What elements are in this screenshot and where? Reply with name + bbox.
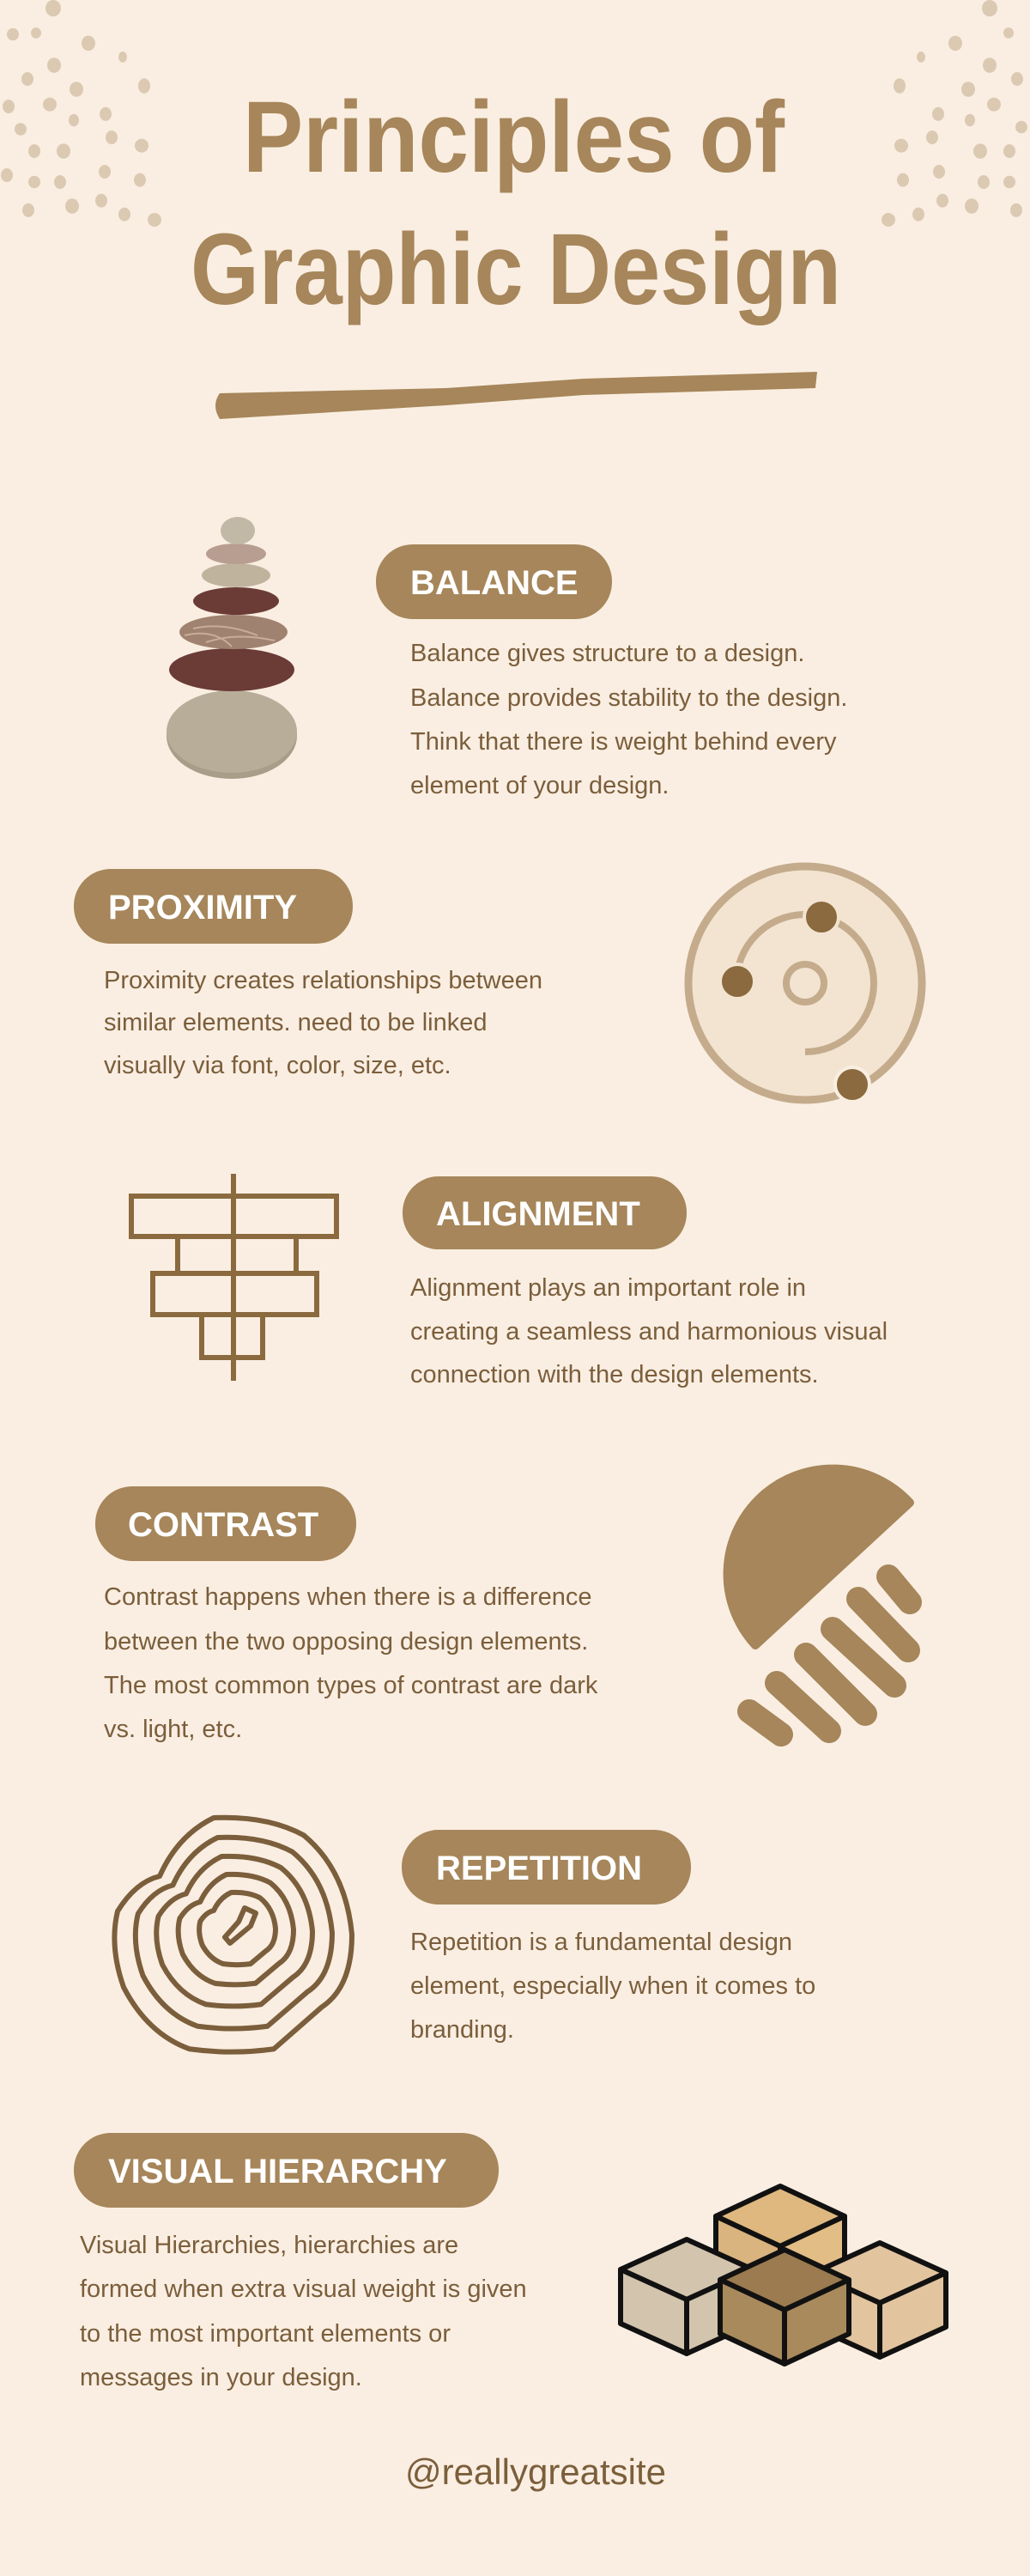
panel: contrast	[95, 1486, 598, 1743]
text: balance: element of your design.	[410, 772, 669, 799]
left cube	[621, 2239, 753, 2300]
text: proximity: similar elements. need to be linked	[104, 1009, 488, 1036]
panel: visual hierarchy	[74, 2133, 527, 2391]
text: visual hierarchy	[80, 2232, 527, 2391]
front cube	[720, 2250, 849, 2310]
text: balance: Balance provides stability to the design.	[410, 684, 847, 712]
title: Graphic Design	[191, 213, 841, 326]
title	[191, 81, 841, 326]
text: contrast: between the two opposing design elements.	[104, 1628, 588, 1656]
text: visual hierarchy: formed when extra visual weight is given	[80, 2275, 527, 2303]
text: contrast: Contrast happens when there is a difference	[104, 1583, 592, 1611]
pill: contrast: CONTRAST	[128, 1506, 318, 1544]
pill: visual hierarchy: VISUAL HIERARCHY	[108, 2153, 447, 2190]
pill: repetition: REPETITION	[436, 1850, 642, 1887]
pill: proximity	[74, 869, 353, 944]
icon: balancing stones	[167, 517, 297, 779]
panel: repetition	[402, 1830, 815, 2044]
text: repetition: element, especially when it comes to	[410, 1972, 815, 2000]
pill: balance	[376, 544, 612, 619]
title: Principles of	[243, 81, 785, 194]
text: balance: Think that there is weight behind every	[410, 728, 837, 756]
text: proximity	[104, 967, 542, 1079]
text: alignment	[410, 1274, 888, 1388]
text: alignment: connection with the design elements.	[410, 1361, 819, 1388]
panel: proximity	[74, 869, 542, 1079]
text: contrast	[104, 1583, 598, 1743]
text: proximity: Proximity creates relationships between	[104, 967, 542, 994]
pill: alignment	[403, 1176, 687, 1249]
text: contrast: The most common types of contrast are dark	[104, 1672, 598, 1699]
text: proximity: visually via font, color, size, etc.	[104, 1052, 451, 1079]
text: balance: Balance gives structure to a design.	[410, 640, 804, 667]
text: balance	[410, 640, 847, 799]
title underline brush stroke	[215, 372, 817, 419]
text: visual hierarchy: messages in your design.	[80, 2364, 362, 2391]
text: visual hierarchy: to the most important elements or	[80, 2320, 451, 2348]
decorative dots left	[1, 0, 161, 227]
pill: contrast	[95, 1486, 356, 1561]
text: alignment: Alignment plays an important role in	[410, 1274, 806, 1302]
icon: contrast half disc with stripes	[728, 1469, 910, 1735]
text: repetition	[410, 1929, 815, 2044]
pill: visual hierarchy	[74, 2133, 499, 2208]
text: alignment: creating a seamless and harmonious visual	[410, 1318, 888, 1346]
panel: alignment	[403, 1176, 888, 1388]
icon: alignment blocks	[131, 1174, 336, 1381]
text: contrast: vs. light, etc.	[104, 1716, 242, 1743]
pill: proximity: PROXIMITY	[108, 889, 297, 927]
icon: orbit circles	[688, 866, 922, 1102]
pill: alignment: ALIGNMENT	[436, 1195, 640, 1233]
pill: repetition	[402, 1830, 691, 1905]
footer handle: @reallygreatsite	[405, 2451, 666, 2492]
right cube	[814, 2243, 946, 2303]
decorative dots right	[882, 0, 1027, 227]
icon: stacked cubes	[621, 2186, 946, 2364]
icon: tree rings	[114, 1818, 352, 2052]
text: repetition: branding.	[410, 2016, 514, 2044]
text: visual hierarchy: Visual Hierarchies, hierarchies are	[80, 2232, 458, 2259]
pill: balance: BALANCE	[410, 564, 579, 602]
back cube	[716, 2186, 845, 2246]
text: repetition: Repetition is a fundamental design	[410, 1929, 792, 1956]
panel: balance	[376, 544, 847, 799]
